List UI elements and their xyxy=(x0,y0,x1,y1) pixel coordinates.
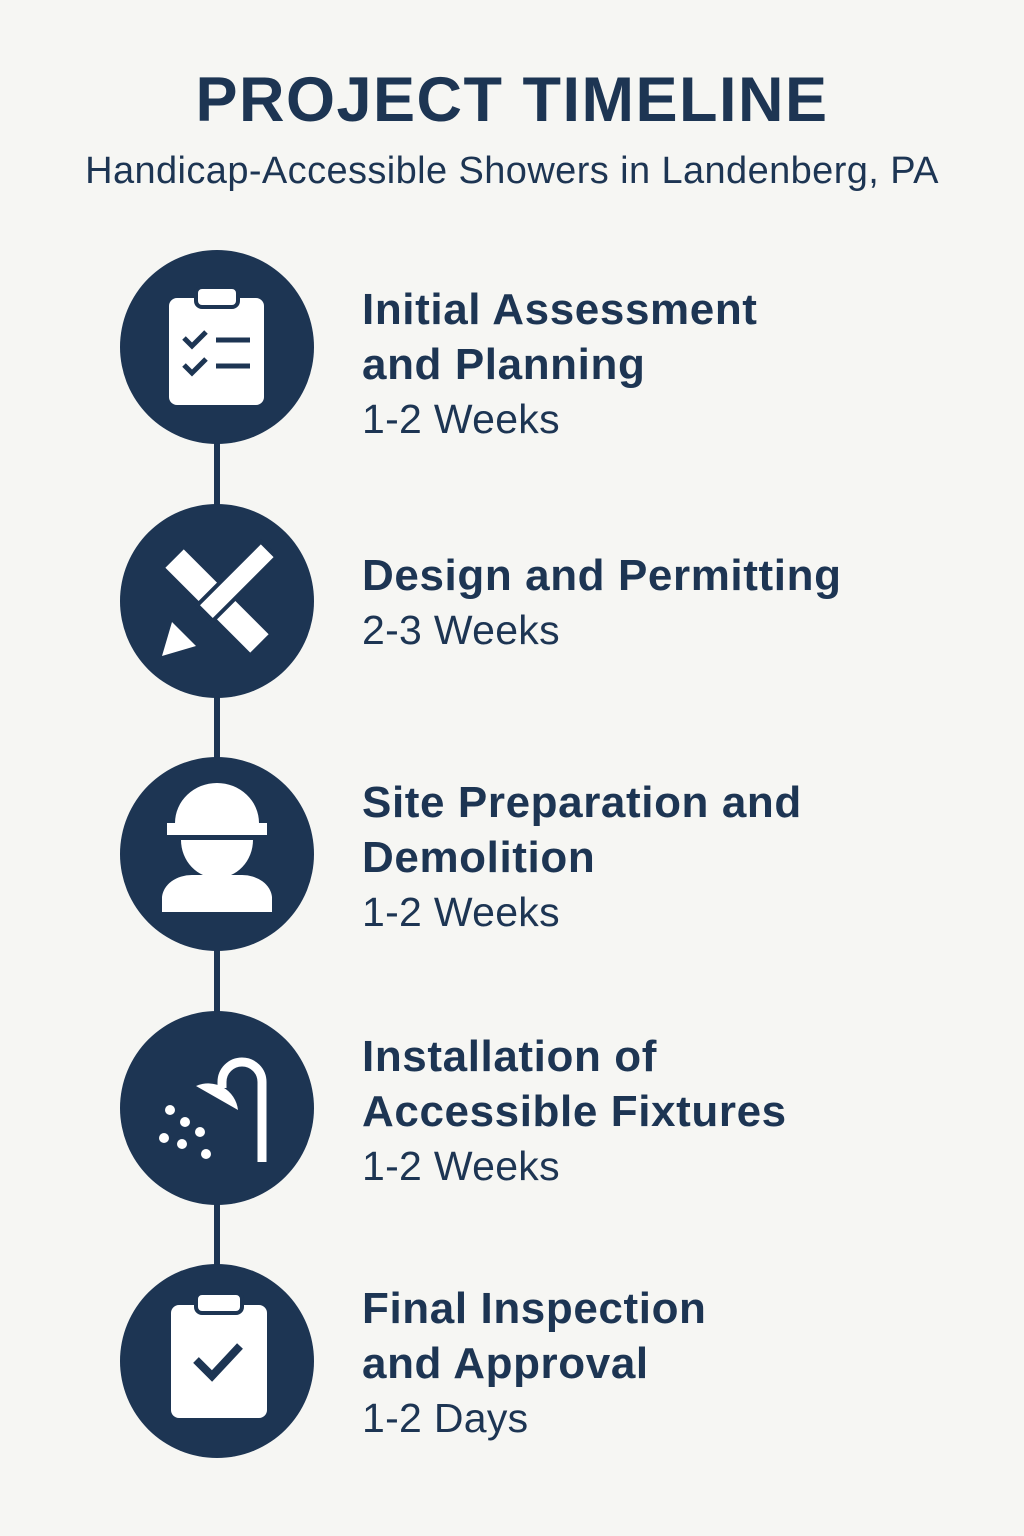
step 4 text: 1-2 Weeks xyxy=(362,1143,560,1189)
step 2 text xyxy=(362,551,842,653)
connector line xyxy=(214,347,220,1361)
step 1 text: and Planning xyxy=(362,340,645,389)
title: PROJECT TIMELINE xyxy=(195,65,829,135)
icon: shower xyxy=(120,1011,314,1205)
step 5 text: 1-2 Days xyxy=(362,1395,528,1441)
step 4 text: Installation of xyxy=(362,1032,657,1081)
step 5 text xyxy=(362,1284,707,1441)
icon: clipboard checklist xyxy=(120,250,314,444)
step 4 text xyxy=(362,1032,787,1189)
step 3 text: Site Preparation and xyxy=(362,778,802,827)
step 2 text: 2-3 Weeks xyxy=(362,607,560,653)
step 1 text: Initial Assessment xyxy=(362,285,758,334)
step 1 text xyxy=(362,285,758,442)
step 3 text xyxy=(362,778,802,935)
icon: worker xyxy=(120,757,314,951)
step 3 text: 1-2 Weeks xyxy=(362,889,560,935)
subtitle: Handicap-Accessible Showers in Landenberg, PA xyxy=(85,150,939,192)
step 5 text: Final Inspection xyxy=(362,1284,707,1333)
icon: clipboard check xyxy=(120,1264,314,1458)
step 4 text: Accessible Fixtures xyxy=(362,1087,787,1136)
step 2 text: Design and Permitting xyxy=(362,551,842,600)
icon: pencil and ruler xyxy=(120,504,314,698)
step 5 text: and Approval xyxy=(362,1339,649,1388)
step 1 text: 1-2 Weeks xyxy=(362,396,560,442)
step 3 text: Demolition xyxy=(362,833,595,882)
